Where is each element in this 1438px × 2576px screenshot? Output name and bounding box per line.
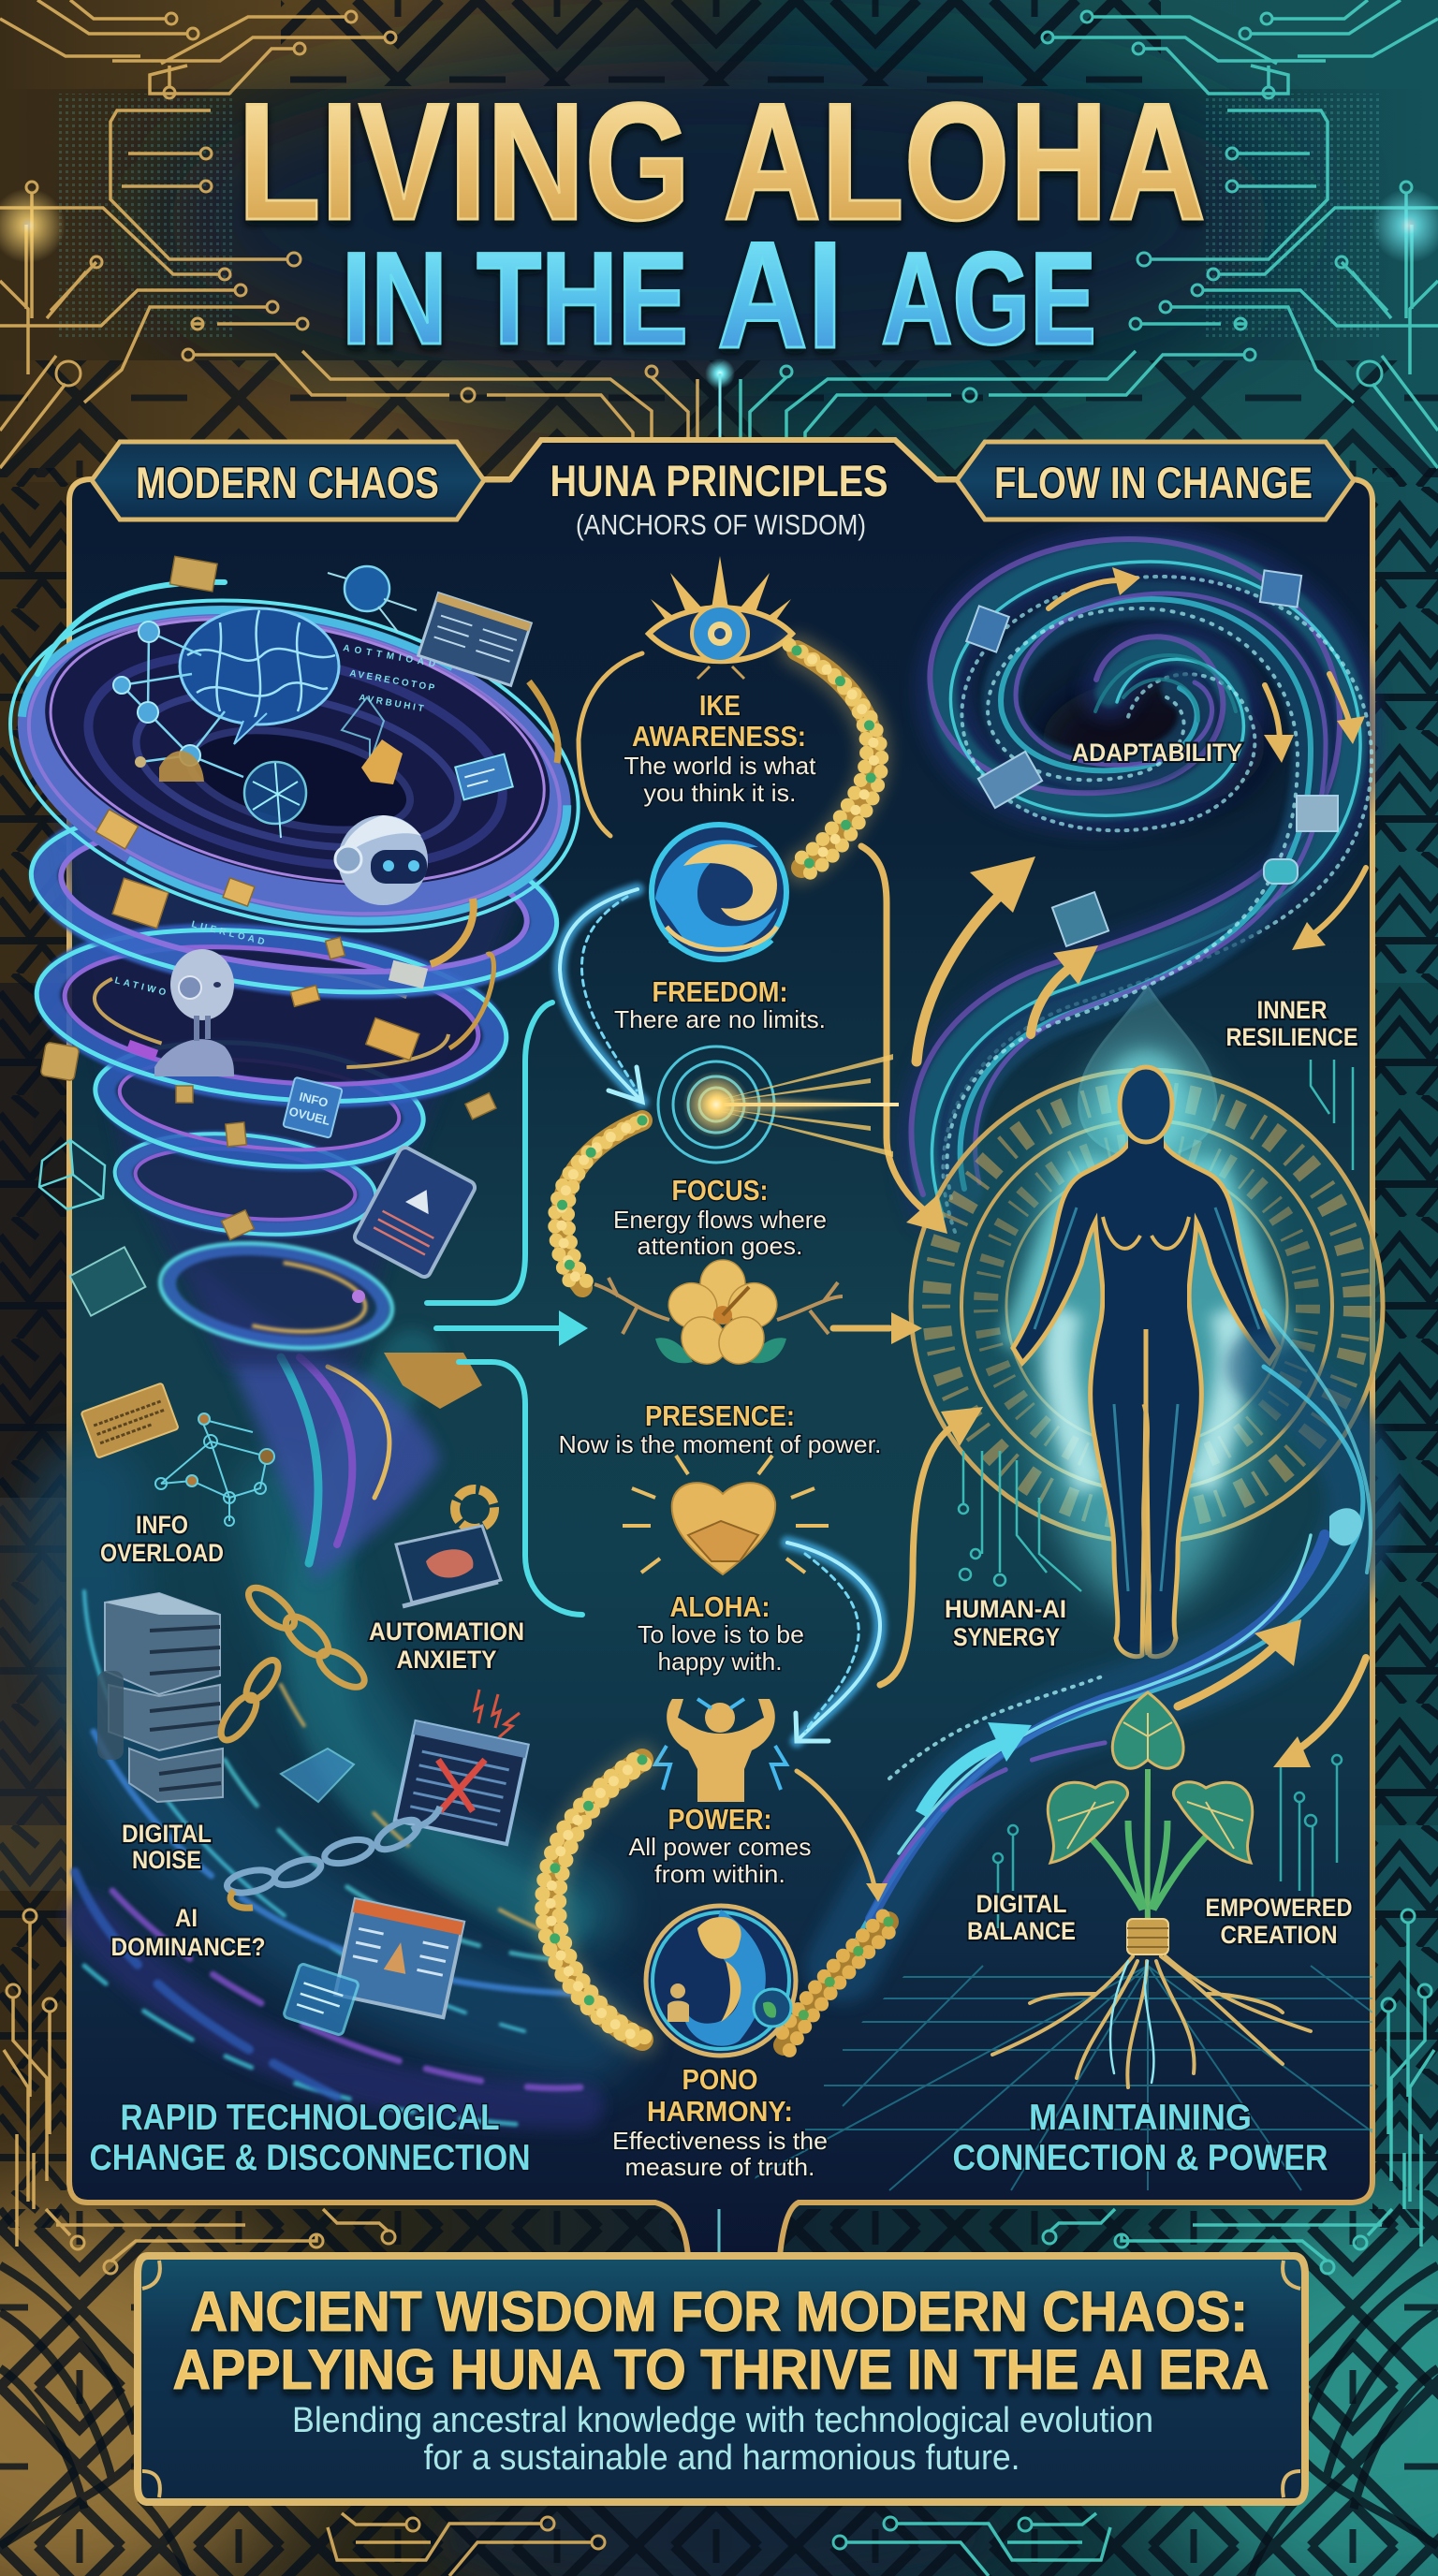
- title: [238, 68, 1206, 380]
- principle: pono: Effectiveness is the: [612, 2127, 828, 2155]
- principle: focus: [613, 1174, 827, 1260]
- circuit traces: right teal: [741, 0, 1438, 2576]
- garbled tornado text: AVERECOTOP: [348, 668, 435, 694]
- panel frame: [69, 440, 1372, 2256]
- principle: aloha: ALOHA:: [670, 1590, 770, 1623]
- icon: floating windows: [39, 593, 531, 1409]
- principle: ike: [624, 689, 816, 807]
- principle: focus: FOCUS:: [672, 1174, 768, 1207]
- principle: power: from within.: [654, 1860, 785, 1888]
- garland: focus: [555, 1118, 649, 1290]
- garbled tornado text: LUERLOAD: [190, 919, 266, 947]
- principle: power: All power comes: [629, 1833, 811, 1861]
- circuit traces: left gold: [0, 0, 697, 2576]
- label: digital balance: DIGITAL: [976, 1890, 1067, 1918]
- document debris: [40, 556, 558, 1239]
- principle: pono: HARMONY:: [647, 2095, 793, 2128]
- garbled tornado text: AVRBUHIT: [358, 693, 424, 714]
- footer heading: APPLYING HUNA TO THRIVE IN THE AI ERA: [172, 2338, 1269, 2401]
- icon: lower windows: [281, 1749, 463, 2036]
- principle: focus: Energy flows where: [613, 1206, 827, 1234]
- icon: gold folder: [81, 1383, 179, 1458]
- circuit lines near figure: [959, 1060, 1353, 1591]
- section tab: flow in change: [957, 442, 1354, 520]
- title line 2: AGE: [881, 225, 1096, 372]
- label: digital noise: [122, 1820, 212, 1874]
- icon: error window: [395, 1690, 528, 1844]
- icon: network graph: [155, 1413, 274, 1526]
- section tab: modern chaos: [92, 442, 484, 520]
- label: ai dominance: DOMINANCE?: [110, 1933, 266, 1961]
- garland: upper right: [789, 645, 882, 873]
- label: empowered creation: EMPOWERED: [1206, 1894, 1352, 1922]
- principle: aloha: happy with.: [657, 1647, 783, 1676]
- upper flow swirl: [911, 539, 1372, 1232]
- principle: freedom: FREEDOM:: [652, 975, 788, 1008]
- caption: rapid change: RAPID TECHNOLOGICAL: [120, 2098, 500, 2138]
- section heading: huna principles: (ANCHORS OF WISDOM): [576, 508, 866, 541]
- icon: blue chain: [225, 1807, 440, 1908]
- label: digital noise: NOISE: [132, 1846, 201, 1874]
- circuit lines near plant: [993, 1755, 1342, 1928]
- principle: ike: IKE: [699, 689, 741, 722]
- icon: laptop and gear: [396, 1489, 501, 1606]
- footer heading: ANCIENT WISDOM FOR MODERN CHAOS:: [190, 2280, 1248, 2343]
- title line 2: AI: [717, 211, 843, 380]
- glow sparks: [0, 188, 1438, 440]
- connector arrows: cyan: [427, 1003, 588, 1615]
- principle: pono: measure of truth.: [625, 2153, 814, 2181]
- tornado lower sweep: [75, 1357, 580, 2125]
- principle: ike: you think it is.: [644, 779, 796, 807]
- caption: maintaining connection: MAINTAINING: [1029, 2098, 1252, 2138]
- label: empowered creation: [1206, 1894, 1352, 1949]
- label: automation anxiety: ANXIETY: [397, 1646, 496, 1674]
- flowing cyan swirl arrows: [560, 889, 880, 1741]
- label: human-ai synergy: HUMAN-AI: [945, 1595, 1066, 1623]
- footer subtitle: for a sustainable and harmonious future.: [423, 2438, 1020, 2478]
- caption: rapid change: [90, 2098, 530, 2178]
- principle: power: [629, 1803, 811, 1888]
- section tab: modern chaos: MODERN CHAOS: [136, 458, 439, 507]
- label: inner resilience: RESILIENCE: [1226, 1023, 1357, 1051]
- principle: ike: The world is what: [624, 752, 816, 780]
- icon: pono circle: [646, 1906, 796, 2056]
- human figure: [1013, 987, 1281, 1657]
- garbled tornado text: [113, 643, 436, 999]
- icon: floating windows: INFO: [298, 1090, 330, 1110]
- footer subtitle: [292, 2401, 1153, 2478]
- left column: modern chaos: [0, 551, 609, 2125]
- principle: presence: [558, 1399, 882, 1458]
- label: ai dominance: AI: [175, 1904, 198, 1932]
- icon: focus target: [658, 1046, 899, 1163]
- tornado rings: [0, 551, 609, 1367]
- gold links between tabs: [484, 477, 957, 483]
- label: digital balance: [967, 1890, 1076, 1945]
- principle: power: POWER:: [668, 1803, 771, 1836]
- icon: power figure: [655, 1699, 786, 1802]
- principle: aloha: [638, 1590, 804, 1676]
- principle: pono: [612, 2063, 828, 2181]
- floor grid: [749, 1966, 1438, 2190]
- principle: presence: PRESENCE:: [645, 1399, 795, 1432]
- connector arrows: gold: [579, 567, 1366, 1902]
- icon: robot head: [335, 815, 428, 905]
- icon: server stack: [97, 1593, 223, 1802]
- caption: maintaining connection: CONNECTION & POWER: [953, 2138, 1328, 2178]
- icon: humanoid robot: [154, 949, 234, 1076]
- principle: aloha: To love is to be: [638, 1620, 804, 1648]
- label: info overload: INFO: [136, 1511, 188, 1539]
- garbled tornado text: LATIWO: [113, 975, 167, 999]
- label: digital noise: DIGITAL: [122, 1820, 212, 1848]
- principle: pono: PONO: [682, 2063, 758, 2096]
- footer heading: [172, 2280, 1269, 2401]
- label: human-ai synergy: [945, 1595, 1066, 1651]
- label: empowered creation: CREATION: [1221, 1921, 1337, 1949]
- footer banner: [138, 2256, 1305, 2502]
- label: human-ai synergy: SYNERGY: [953, 1623, 1060, 1651]
- principle: focus: attention goes.: [637, 1232, 803, 1260]
- icon: hibiscus presence: [594, 1260, 843, 1372]
- section heading: huna principles: [550, 456, 888, 541]
- label: digital balance: BALANCE: [967, 1917, 1076, 1945]
- right column: flow in change: [749, 539, 1438, 2190]
- label: ai dominance: [110, 1904, 266, 1961]
- icon: heart handshake: [623, 1456, 829, 1574]
- title line 1: LIVING ALOHA: [238, 68, 1206, 255]
- principle: freedom: There are no limits.: [614, 1005, 826, 1033]
- label: info overload: [100, 1511, 224, 1567]
- lower flow band: [843, 1310, 1371, 1966]
- icon: eye of awareness: [649, 556, 792, 679]
- label: automation anxiety: [369, 1617, 524, 1674]
- title line 2: IN THE: [342, 225, 688, 372]
- icon: neural network and brain: [113, 566, 417, 838]
- label: inner resilience: INNER: [1256, 996, 1328, 1024]
- icon: floating windows: OVUEL: [287, 1105, 331, 1128]
- caption: maintaining connection: [953, 2098, 1328, 2178]
- garland: right small: [778, 1916, 894, 2051]
- plant and roots: [992, 1692, 1311, 2087]
- label: automation anxiety: AUTOMATION: [369, 1617, 524, 1646]
- principle: ike: AWARENESS:: [632, 720, 806, 753]
- tornado tail: [187, 1254, 440, 1582]
- label: inner resilience: [1226, 996, 1357, 1051]
- mandala circle: [911, 1070, 1383, 1542]
- icon: gold chains: [214, 1581, 370, 1746]
- title line 2: [342, 211, 1096, 380]
- garland: left large: [542, 1760, 651, 2040]
- footer subtitle: Blending ancestral knowledge with technological evolution: [292, 2401, 1153, 2440]
- principle: presence: Now is the moment of power.: [558, 1430, 882, 1458]
- label: info overload: OVERLOAD: [100, 1539, 224, 1567]
- icon: freedom wave: [652, 825, 786, 959]
- caption: rapid change: CHANGE & DISCONNECTION: [90, 2138, 530, 2178]
- label: adaptability: ADAPTABILITY: [1072, 739, 1242, 767]
- section tab: flow in change: FLOW IN CHANGE: [994, 458, 1313, 507]
- garbled tornado text: AOTTMIOAD: [342, 643, 436, 669]
- principle: freedom: [614, 975, 826, 1033]
- arrow: cyan bottom flow: [921, 1722, 1032, 1814]
- section heading: huna principles: HUNA PRINCIPLES: [550, 456, 888, 505]
